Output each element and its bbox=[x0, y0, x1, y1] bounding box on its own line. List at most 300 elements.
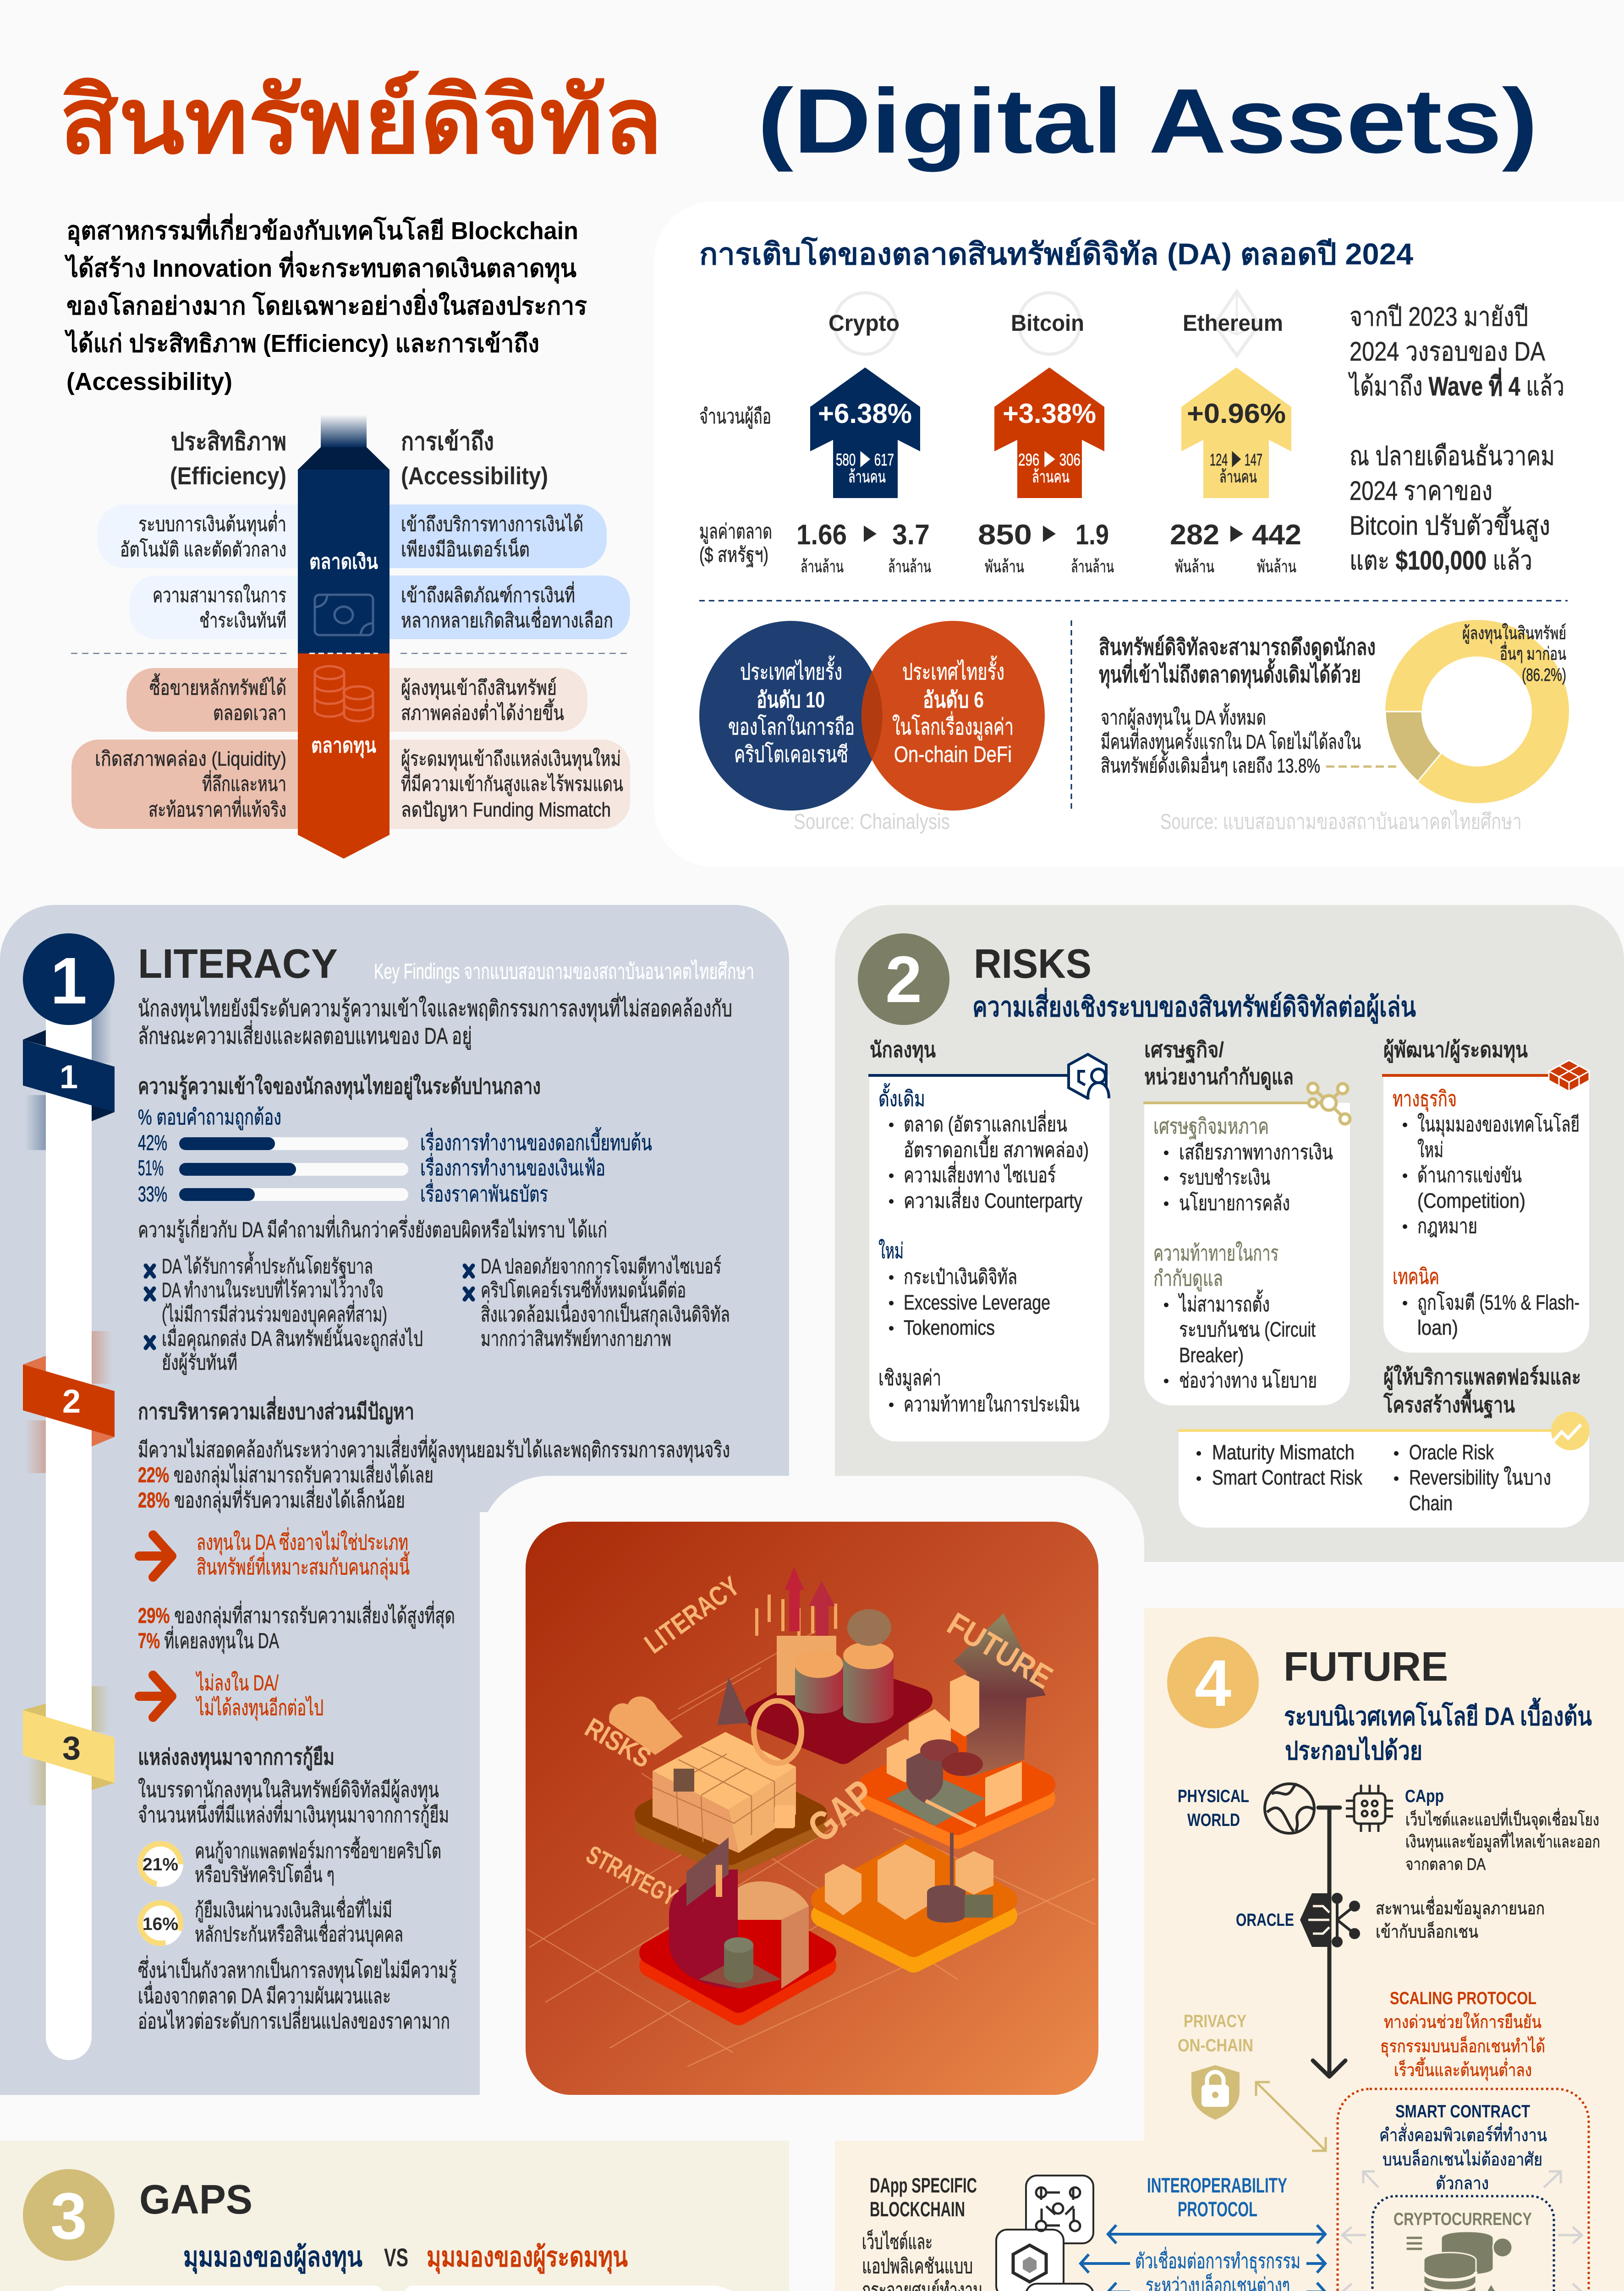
title: (Digital Assets) bbox=[757, 70, 1538, 172]
investor access text: จากผู้ลงทุนใน DA ทั้งหมด bbox=[1101, 703, 1266, 730]
left column heading bbox=[170, 428, 286, 490]
platform: risks bbox=[646, 1771, 816, 1865]
card: investors: อัตราดอกเบี้ย สภาพคล่อง) bbox=[904, 1135, 1089, 1162]
dapp icon cards bbox=[996, 2176, 1093, 2291]
venn left text: คริปโตเคอเรนซี bbox=[734, 741, 848, 767]
closing paragraph: ซึ่งน่าเป็นกังวลหากเป็นการลงทุนโดยไม่มีความรู้ bbox=[138, 1955, 457, 1984]
pill: access with internet: เข้าถึงบริการทางการเงินได้ bbox=[401, 513, 583, 536]
cryptocurrency box: CRYPTOCURRENCY bbox=[1394, 2209, 1532, 2229]
number badge 1 bbox=[23, 933, 115, 1025]
card: developers and fundraisers: loan) bbox=[1417, 1316, 1458, 1339]
capp description bbox=[1405, 1787, 1600, 1874]
card: developers and fundraisers: กฎหมาย bbox=[1417, 1214, 1477, 1238]
donut chart: investors: อื่นๆ มาก่อน bbox=[1500, 641, 1566, 664]
source: survey: Source: แบบสอบถามของสถาบันอนาคตไทยศึกษา bbox=[1160, 809, 1522, 833]
risk management text: 22% ของกลุ่มไม่สามารถรับความเสี่ยงได้เลย bbox=[138, 1460, 433, 1488]
lead paragraph bbox=[138, 993, 732, 1050]
platform: future bbox=[871, 1741, 1044, 1837]
card: developers and fundraisers bbox=[1382, 1037, 1589, 1353]
card: developers and fundraisers: ผู้พัฒนา/ผู้ระดมทุน bbox=[1383, 1037, 1528, 1063]
pill: liquidity: สะท้อนราคาที่แท้จริง bbox=[148, 795, 286, 821]
misconceptions list left: ยังผู้รับทันที bbox=[162, 1351, 237, 1375]
investor access text: มีคนที่ลงทุนครั้งแรกใน DA โดยไม่ได้ลงใน bbox=[1101, 727, 1361, 754]
interoperability protocol: INTEROPERABILITY bbox=[1147, 2174, 1287, 2197]
illustration labels: FUTURE bbox=[941, 1606, 1059, 1696]
pill: instant settlement: ความสามารถในการ bbox=[153, 584, 286, 607]
number badge 4: 4 bbox=[1195, 1646, 1231, 1720]
market value figures: ล้านล้าน bbox=[801, 557, 844, 576]
title: สินทรัพย์ดิจิทัล bbox=[60, 70, 663, 172]
card: investors: ตลาด (อัตราแลกเปลี่ยน bbox=[904, 1110, 1067, 1136]
pill: liquidity bbox=[71, 740, 298, 829]
icon: network bbox=[1308, 1083, 1350, 1124]
bar chart: correct answers: 51% bbox=[138, 1156, 164, 1180]
ribbon 3: 3 bbox=[62, 1730, 81, 1767]
misconceptions list right: DA ปลอดภัยจากการโจมตีทางไซเบอร์ bbox=[481, 1255, 721, 1278]
bar chart: correct answers: เรื่องราคาพันธบัตร bbox=[420, 1179, 548, 1206]
interoperability protocol: PROTOCOL bbox=[1178, 2198, 1257, 2221]
card: economy and regulators: ไม่สามารถตั้ง bbox=[1178, 1289, 1270, 1316]
faint coin icons bbox=[834, 291, 1259, 356]
ring 21% label: คนกู้จากแพลตฟอร์มการซื้อขายคริปโต bbox=[195, 1836, 441, 1863]
number badge 3 bbox=[23, 2169, 115, 2261]
section title: GAPS bbox=[139, 2177, 252, 2223]
number badge 2: 2 bbox=[885, 943, 922, 1016]
borrowing text: ในบรรดานักลงทุนในสินทรัพย์ดิจิทัลมีผู้ลงทุน bbox=[138, 1777, 439, 1803]
borrowing text bbox=[138, 1777, 449, 1828]
holders label: จำนวนผู้ถือ bbox=[699, 405, 771, 429]
physical world label: WORLD bbox=[1187, 1810, 1240, 1830]
panel: market growth 2024 bbox=[654, 202, 1624, 867]
card: economy and regulators: ระบบกันชน (Circuit bbox=[1179, 1318, 1316, 1341]
card: economy and regulators: เศรษฐกิจ/ bbox=[1144, 1037, 1224, 1064]
number badge 4 bbox=[1167, 1637, 1259, 1728]
venn right text: ประเทศไทยรั้ง bbox=[902, 656, 1004, 685]
icon: coins bbox=[315, 666, 373, 721]
bar chart: correct answers: เรื่องการทำงานของเงินเฟ้อ bbox=[420, 1153, 605, 1180]
left column heading: ประสิทธิภาพ bbox=[171, 428, 286, 455]
privacy double arrow bbox=[1256, 2082, 1326, 2151]
misconceptions list left: (ไม่มีการมีส่วนร่วมของบุคคลที่สาม) bbox=[162, 1300, 387, 1327]
heading: risk management: การบริหารความเสี่ยงบางส่วนมีปัญหา bbox=[138, 1396, 414, 1425]
heading: การเติบโตของตลาดสินทรัพย์ดิจิทัล (DA) ตลอดปี 2024 bbox=[699, 236, 1413, 271]
ring 16% label bbox=[195, 1896, 403, 1947]
column labels bbox=[828, 310, 1283, 336]
card: platform providers: โครงสร้างพื้นฐาน bbox=[1383, 1389, 1515, 1419]
intro text block: (Accessibility) bbox=[66, 368, 232, 395]
section subtitle: ความเสี่ยงเชิงระบบของสินทรัพย์ดิจิทัลต่อผู้เล่น bbox=[972, 987, 1416, 1024]
card: developers and fundraisers: (Competition) bbox=[1417, 1189, 1525, 1212]
market value label: ($ สหรัฐฯ) bbox=[699, 543, 768, 567]
arrow: ethereum holders: +0.96% bbox=[1187, 398, 1286, 429]
market value figures: ล้านล้าน bbox=[888, 557, 931, 576]
comparison heading bbox=[183, 2242, 628, 2274]
market value figures: 850 bbox=[978, 519, 1032, 551]
risk management text: 28% ของกลุ่มที่รับความเสี่ยงได้เล็กน้อย bbox=[138, 1485, 405, 1513]
section title: FUTURE bbox=[1284, 1644, 1448, 1690]
pill: trade any time: ซื้อขายหลักทรัพย์ได้ bbox=[149, 673, 286, 699]
market value label bbox=[699, 520, 772, 567]
number badge 3: 3 bbox=[50, 2179, 87, 2253]
misconceptions intro: ความรู้เกี่ยวกับ DA มีคำถามที่เกินกว่าครึ่งยังตอบผิดหรือไม่ทราบ ได้แก่ bbox=[138, 1215, 607, 1243]
arrow 1 callout bbox=[197, 1527, 410, 1580]
interoperability protocol: ตัวเชื่อมต่อการทำธุรกรรม bbox=[1135, 2247, 1300, 2274]
pill: low-cost system bbox=[97, 504, 298, 568]
market value figures: พันล้าน bbox=[1257, 557, 1296, 576]
cube and cloud bbox=[609, 1677, 801, 1853]
central column arrow bbox=[298, 415, 390, 859]
card: investors: ความเสี่ยงทาง ไซเบอร์ bbox=[904, 1161, 1056, 1187]
misconceptions list left: DA ได้รับการค้ำประกันโดยรัฐบาล bbox=[162, 1251, 373, 1279]
bar chart: correct answers: 33% bbox=[138, 1182, 167, 1206]
card: platform providers bbox=[1178, 1364, 1590, 1528]
pill: trade any time: ตลอดเวลา bbox=[213, 702, 286, 724]
comparison heading: มุมมองของผู้ลงทุน bbox=[183, 2242, 362, 2274]
ring 16% label: กู้ยืมเงินผ่านวงเงินสินเชื่อที่ไม่มี bbox=[195, 1896, 392, 1923]
gap objects bbox=[825, 1801, 993, 1923]
comparison heading: มุมมองของผู้ระดมทุน bbox=[427, 2242, 628, 2274]
ribbon 1: 1 bbox=[60, 1059, 78, 1096]
number badge 2 bbox=[858, 933, 949, 1025]
pill: access with internet bbox=[390, 504, 607, 568]
pill: investor access: ผู้ลงทุนเข้าถึงสินทรัพย์ bbox=[401, 677, 557, 700]
privacy on-chain: ON-CHAIN bbox=[1178, 2036, 1253, 2055]
market value figures: พันล้าน bbox=[1175, 557, 1214, 576]
card: investors: เชิงมูลค่า bbox=[878, 1365, 941, 1391]
pill: low-cost system: อัตโนมัติ และตัดตัวกลาง bbox=[120, 538, 286, 561]
left column heading: (Efficiency) bbox=[170, 462, 286, 490]
market value label: มูลค่าตลาด bbox=[699, 520, 772, 544]
dapp specific blockchain text: แอปพลิเคชันแบบ bbox=[862, 2254, 973, 2278]
icon: banknote bbox=[315, 595, 373, 635]
card: economy and regulators: ช่องว่างทาง นโยบาย bbox=[1179, 1369, 1317, 1392]
dapp specific blockchain text bbox=[862, 2174, 983, 2291]
ribbon 2: 2 bbox=[62, 1383, 81, 1420]
arrow: bitcoin holders bbox=[994, 367, 1104, 498]
donut chart: investors: ผู้ลงทุนในสินทรัพย์ bbox=[1462, 623, 1566, 644]
arrow 2 callout bbox=[195, 1671, 324, 1721]
venn left text: อันดับ 10 bbox=[757, 688, 825, 713]
investor access text: สินทรัพย์ดิจิทัลจะสามารถดึงดูดนักลง bbox=[1099, 635, 1376, 661]
icon: bricks bbox=[1549, 1060, 1589, 1091]
card: economy and regulators: เสถียรภาพทางการเงิน bbox=[1179, 1140, 1333, 1164]
pill: investor access: สภาพคล่องต่ำได้ง่ายขึ้น bbox=[401, 698, 564, 724]
smart contract dotted box: บนบล็อกเชนไม่ต้องอาศัย bbox=[1383, 2148, 1542, 2170]
future arrow bbox=[954, 1613, 1046, 1778]
scaling protocol: SCALING PROTOCOL bbox=[1390, 1989, 1536, 2008]
arrow: bitcoin holders: 296 ▶ 306 bbox=[1018, 450, 1081, 469]
small radiating arrows bbox=[1342, 2171, 1582, 2291]
card: economy and regulators bbox=[1143, 1037, 1350, 1405]
bar chart: correct answers: 42% bbox=[138, 1130, 167, 1155]
section subtitle bbox=[1284, 1698, 1592, 1765]
card: platform providers: Oracle Risk bbox=[1409, 1441, 1494, 1464]
investor access text: สินทรัพย์ดั้งเดิมอื่นๆ เลยถึง 13.8% bbox=[1101, 751, 1320, 777]
illustration labels bbox=[580, 1570, 1059, 1912]
misconceptions list left: เมื่อคุณกดส่ง DA สินทรัพย์นั้นจะถูกส่งไป bbox=[162, 1324, 423, 1351]
section title: RISKS bbox=[974, 941, 1092, 987]
intro text block: อุตสาหกรรมที่เกี่ยวข้องกับเทคโนโลยี Blockchain bbox=[66, 213, 578, 247]
scaling protocol bbox=[1380, 1989, 1545, 2081]
side note: ณ ปลายเดือนธันวาคม bbox=[1350, 441, 1555, 471]
pill: fundraiser access: ลดปัญหา Funding Mismatch bbox=[401, 799, 611, 821]
intro text block bbox=[64, 213, 587, 395]
physical world label bbox=[1178, 1787, 1249, 1830]
arrow 2 callout: ไม่ได้ลงทุนอีกต่อไป bbox=[195, 1695, 324, 1721]
intro text block: ได้แก่ ประสิทธิภาพ (Efficiency) และการเข้าถึง bbox=[64, 329, 539, 357]
comparison heading: VS bbox=[384, 2243, 408, 2272]
panel: gaps bbox=[0, 2141, 789, 2291]
arrow 1 callout: ลงทุนใน DA ซึ่งอาจไม่ใช่ประเภท bbox=[197, 1527, 408, 1556]
card: fundraiser A bbox=[405, 2286, 752, 2291]
pill: fundraiser access: ผู้ระดมทุนเข้าถึงแหล่งเงินทุนใหม่ bbox=[401, 747, 621, 771]
source: chainalysis: Source: Chainalysis bbox=[794, 809, 950, 833]
arrow: ethereum holders bbox=[1181, 367, 1291, 498]
arrow 1 callout: สินทรัพย์ที่เหมาะสมกับคนกลุ่มนี้ bbox=[197, 1551, 410, 1580]
side note bbox=[1348, 302, 1564, 575]
card: developers and fundraisers: ถูกโจมตี (51% & Flash- bbox=[1417, 1291, 1580, 1315]
side note: Bitcoin ปรับตัวขึ้นสูง bbox=[1350, 507, 1550, 542]
label: money market: ตลาดเงิน bbox=[309, 550, 378, 573]
column labels: Ethereum bbox=[1183, 310, 1283, 336]
intro text block: ของโลกอย่างมาก โดยเฉพาะอย่างยิ่งในสองประการ bbox=[66, 288, 587, 320]
ribbon 1 bbox=[23, 1030, 115, 1121]
oracle description: เข้ากับบล็อกเชน bbox=[1376, 1921, 1478, 1942]
smart contract dotted box: SMART CONTRACT bbox=[1395, 2102, 1530, 2121]
market value figures: พันล้าน bbox=[985, 557, 1024, 576]
illustration labels: GAP bbox=[800, 1771, 883, 1852]
arrow: ethereum holders: ล้านคน bbox=[1219, 467, 1257, 486]
ring chart 21%: 21% bbox=[143, 1855, 178, 1874]
title bbox=[60, 70, 1538, 172]
arrow: crypto holders: 580 ▶ 617 bbox=[836, 450, 894, 469]
venn left text bbox=[728, 656, 855, 767]
ring 21% label bbox=[195, 1836, 441, 1886]
panel: literacy bbox=[0, 905, 789, 2095]
pill: liquidity: ที่ลึกและหนา bbox=[202, 770, 286, 795]
heading: knowledge level: ความรู้ความเข้าใจของนักลงทุนไทยอยู่ในระดับปานกลาง bbox=[138, 1073, 541, 1100]
platform: dark red bbox=[756, 1672, 921, 1753]
closing paragraph: เนื่องจากตลาด DA มีความผันผวนและ bbox=[138, 1981, 391, 2008]
card: investors bbox=[868, 1037, 1109, 1441]
arrow 2 bbox=[139, 1675, 172, 1717]
physical world label: PHYSICAL bbox=[1178, 1787, 1249, 1806]
card: economy and regulators: Breaker) bbox=[1179, 1343, 1244, 1367]
closing paragraph: อ่อนไหวต่อระดับการเปลี่ยนแปลงของราคามาก bbox=[138, 2006, 450, 2033]
misconceptions list right: คริปโตเคอร์เรนซีทั้งหมดนั้นดีต่อ bbox=[481, 1275, 686, 1302]
market value figures: 1.9 bbox=[1075, 519, 1109, 551]
ribbon 3 bbox=[23, 1704, 115, 1790]
platform: gap bbox=[823, 1849, 1006, 1961]
card: investors: ความเสี่ยง Counterparty bbox=[904, 1186, 1082, 1212]
venn right text: ในโลกเรื่องมูลค่า bbox=[892, 711, 1014, 740]
arrow: crypto holders bbox=[810, 367, 920, 498]
scaling protocol: ธุรกรรมบนบล็อกเชนทำได้ bbox=[1380, 2035, 1545, 2057]
bar chart: correct answers: เรื่องการทำงานของดอกเบี้ยทบต้น bbox=[420, 1127, 652, 1155]
risk management text: มีความไม่สอดคล้องกันระหว่างความเสี่ยงที่ผู้ลงทุนยอมรับได้และพฤติกรรมการลงทุนจริง bbox=[138, 1435, 730, 1463]
card: economy and regulators: ระบบชำระเงิน bbox=[1179, 1166, 1270, 1189]
card: platform providers: Reversibility ในบาง bbox=[1409, 1466, 1551, 1489]
high risk group text bbox=[138, 1600, 455, 1654]
illustration labels: LITERACY bbox=[639, 1570, 745, 1660]
icon: investor shield bbox=[1069, 1054, 1109, 1098]
misconceptions list left bbox=[146, 1251, 423, 1375]
risk management text bbox=[138, 1435, 730, 1513]
coins and brain bbox=[755, 1567, 894, 1723]
venn left text: ของโลกในการถือ bbox=[728, 714, 855, 740]
card: economy and regulators: ความท้าทายในการ bbox=[1153, 1241, 1278, 1265]
smart contract dotted box: ตัวกลาง bbox=[1436, 2174, 1489, 2193]
card: developers and fundraisers: ทางธุรกิจ bbox=[1393, 1086, 1457, 1112]
key findings note: Key Findings จากแบบสอบถามของสถาบันอนาคตไทยศึกษา bbox=[374, 959, 754, 983]
venn right text: On-chain DeFi bbox=[894, 742, 1012, 767]
dapp specific blockchain text: เว็บไซต์และ bbox=[862, 2230, 933, 2253]
pill: fundraiser access: ที่มีความเข้ากันสูงและไร้พรมแดน bbox=[401, 770, 623, 796]
oracle description bbox=[1376, 1896, 1545, 1942]
intro text block: ได้สร้าง Innovation ที่จะกระทบตลาดเงินตลาดทุน bbox=[64, 251, 576, 284]
arrow: bitcoin holders: ล้านคน bbox=[1032, 467, 1070, 486]
illustration: isometric ecosystem bbox=[526, 1522, 1098, 2095]
platform: strategy bbox=[651, 1904, 825, 2014]
ring chart 16%: 16% bbox=[143, 1914, 178, 1934]
dapp specific blockchain text: BLOCKCHAIN bbox=[870, 2198, 965, 2221]
card: developers and fundraisers: ด้านการแข่งขัน bbox=[1417, 1163, 1522, 1187]
venn right text bbox=[892, 656, 1014, 767]
card: developers and fundraisers: ใหม่ bbox=[1417, 1138, 1443, 1162]
icon: coin stacks bbox=[1406, 2231, 1512, 2291]
side note: จากปี 2023 มายังปี bbox=[1350, 302, 1528, 332]
illustration labels: RISKS bbox=[580, 1712, 656, 1774]
market value figures: 3.7 bbox=[892, 519, 930, 551]
cryptocurrency box bbox=[1372, 2196, 1554, 2291]
panel: efficiency and accessibility diagram bbox=[71, 415, 630, 859]
ring 16% label: หลักประกันหรือสินเชื่อส่วนบุคคล bbox=[195, 1920, 403, 1947]
market value figures: ล้านล้าน bbox=[1071, 557, 1114, 576]
pill: liquidity: เกิดสภาพคล่อง (Liquidity) bbox=[95, 748, 286, 770]
card: economy and regulators: กำกับดูแล bbox=[1153, 1266, 1223, 1292]
pill: instant settlement bbox=[129, 575, 298, 639]
panel: illustration background bbox=[480, 1476, 1144, 2140]
pill: fundraiser access bbox=[390, 740, 630, 829]
number badge 1: 1 bbox=[50, 944, 87, 1018]
donut chart: investors bbox=[1385, 620, 1569, 803]
smart contract dotted box: คำสั่งคอมพิวเตอร์ที่ทำงาน bbox=[1379, 2123, 1547, 2145]
misconceptions list left: DA ทำงานในระบบที่ไร้ความไว้วางใจ bbox=[162, 1276, 384, 1302]
capp description: CApp bbox=[1405, 1787, 1444, 1806]
card: economy and regulators: เศรษฐกิจมหภาค bbox=[1153, 1114, 1269, 1139]
card: platform providers: Chain bbox=[1409, 1491, 1453, 1515]
privacy on-chain bbox=[1178, 2011, 1253, 2120]
pill: diverse products bbox=[390, 575, 630, 639]
panel: future bbox=[835, 1608, 1624, 2291]
white ribbon column bbox=[46, 1008, 92, 2060]
card: platform providers: ผู้ให้บริการแพลตฟอร์มและ bbox=[1383, 1364, 1581, 1391]
card: investors: Tokenomics bbox=[904, 1316, 995, 1339]
borrowing text: จำนวนหนึ่งที่มีแหล่งที่มาเงินทุนมาจากการกู้ยืม bbox=[138, 1800, 449, 1828]
card: investors: ดั้งเดิม bbox=[878, 1083, 925, 1111]
side note: 2024 ราคาของ bbox=[1350, 476, 1492, 506]
high risk group text: 7% ที่เคยลงทุนใน DA bbox=[138, 1626, 279, 1654]
scaling protocol: เร็วขึ้นและต้นทุนต่ำลง bbox=[1394, 2057, 1532, 2081]
arrow 1 bbox=[139, 1535, 172, 1577]
side note: ได้มาถึง Wave ที่ 4 แล้ว bbox=[1348, 367, 1564, 401]
icon: oracle bbox=[1300, 1893, 1359, 1947]
card: platform providers: Maturity Mismatch bbox=[1212, 1441, 1355, 1464]
pie column and coins bbox=[669, 1837, 809, 1989]
scaling protocol: ทางด่วนช่วยให้การยืนยัน bbox=[1384, 2012, 1542, 2032]
icon: chip bbox=[1346, 1785, 1393, 1832]
card: investors: ความท้าทายในการประเมิน bbox=[904, 1392, 1080, 1416]
market value figures: 1.66 bbox=[796, 519, 847, 551]
card: investors: นักลงทุน bbox=[870, 1037, 936, 1063]
smart contract dotted box bbox=[1338, 2089, 1589, 2291]
card: economy and regulators: หน่วยงานกำกับดูแล bbox=[1144, 1064, 1294, 1091]
high risk group text: 29% ของกลุ่มที่สามารถรับความเสี่ยงได้สูงที่สุด bbox=[138, 1600, 455, 1629]
card: investors: Excessive Leverage bbox=[904, 1291, 1050, 1314]
arrow 2 callout: ไม่ลงใน DA/ bbox=[195, 1671, 279, 1695]
lead paragraph: นักลงทุนไทยยังมีระดับความรู้ความเข้าใจและพฤติกรรมการลงทุนที่ไม่สอดคล้องกับ bbox=[138, 993, 732, 1022]
side note: แตะ $100,000 แล้ว bbox=[1350, 546, 1532, 575]
investor access text: ทุนที่เข้าไม่ถึงตลาดทุนดั้งเดิมได้ด้วย bbox=[1099, 658, 1361, 689]
market value figures: 442 bbox=[1252, 519, 1301, 551]
oracle label: ORACLE bbox=[1236, 1910, 1294, 1930]
bar chart: correct answers: % ตอบคำถามถูกต้อง bbox=[138, 1105, 281, 1130]
arrow: bitcoin holders: +3.38% bbox=[1003, 398, 1096, 429]
pill: access with internet: เพียงมีอินเตอร์เน็ต bbox=[401, 537, 530, 561]
icon: growth circle bbox=[1551, 1412, 1590, 1450]
arrow: ethereum holders: 124 ▶ 147 bbox=[1210, 450, 1262, 469]
column labels: Crypto bbox=[828, 310, 900, 336]
panel: risks bbox=[835, 905, 1624, 1562]
pill: trade any time bbox=[126, 668, 298, 732]
venn left text: ประเทศไทยรั้ง bbox=[740, 656, 842, 685]
capp description: จากตลาด DA bbox=[1405, 1855, 1486, 1874]
arrow: crypto holders: ล้านคน bbox=[848, 467, 886, 486]
investor access text bbox=[1099, 635, 1376, 777]
market value figures bbox=[796, 519, 1301, 576]
pill: investor access bbox=[390, 668, 587, 732]
card: economy and regulators: นโยบายการคลัง bbox=[1179, 1191, 1290, 1215]
oracle description: สะพานเชื่อมข้อมูลภายนอก bbox=[1376, 1896, 1545, 1919]
ribbon shadows bbox=[25, 1003, 112, 1805]
servers and shield bbox=[887, 1675, 1022, 1826]
pill: low-cost system: ระบบการเงินต้นทุนต่ำ bbox=[138, 510, 286, 537]
bar chart: correct answers bbox=[138, 1105, 652, 1206]
venn right text: อันดับ 6 bbox=[923, 688, 984, 713]
card: investors: กระเป๋าเงินดิจิทัล bbox=[904, 1265, 1017, 1288]
card: investor A bbox=[34, 2286, 382, 2291]
right column heading bbox=[401, 428, 548, 490]
label: capital market: ตลาดทุน bbox=[311, 734, 376, 758]
card: investors: ใหม่ bbox=[878, 1239, 904, 1263]
pill: diverse products: เข้าถึงผลิตภัณฑ์การเงินที่ bbox=[401, 581, 575, 607]
privacy on-chain: PRIVACY bbox=[1184, 2011, 1246, 2031]
misconceptions list right bbox=[465, 1255, 730, 1350]
section title: LITERACY bbox=[138, 941, 338, 987]
main vertical arrow bbox=[1313, 1808, 1345, 2077]
ring chart 16% bbox=[136, 1898, 185, 1948]
interoperability protocol bbox=[1081, 2174, 1325, 2291]
section subtitle: ประกอบไปด้วย bbox=[1285, 1736, 1422, 1765]
dapp specific blockchain text: DApp SPECIFIC bbox=[870, 2174, 977, 2197]
misconceptions list right: สิ่งแวดล้อมเนื่องจากเป็นสกุลเงินดิจิทัล bbox=[481, 1300, 730, 1327]
misconceptions list right: มากกว่าสินทรัพย์ทางกายภาพ bbox=[481, 1327, 671, 1350]
ring 21% label: หรือบริษัทคริปโตอื่น ๆ bbox=[195, 1860, 335, 1886]
card: developers and fundraisers: เทคนิค bbox=[1393, 1264, 1439, 1288]
venn diagram bbox=[699, 621, 1045, 811]
ring chart 21% bbox=[137, 1841, 184, 1887]
pill: instant settlement: ชำระเงินทันที bbox=[199, 609, 286, 632]
